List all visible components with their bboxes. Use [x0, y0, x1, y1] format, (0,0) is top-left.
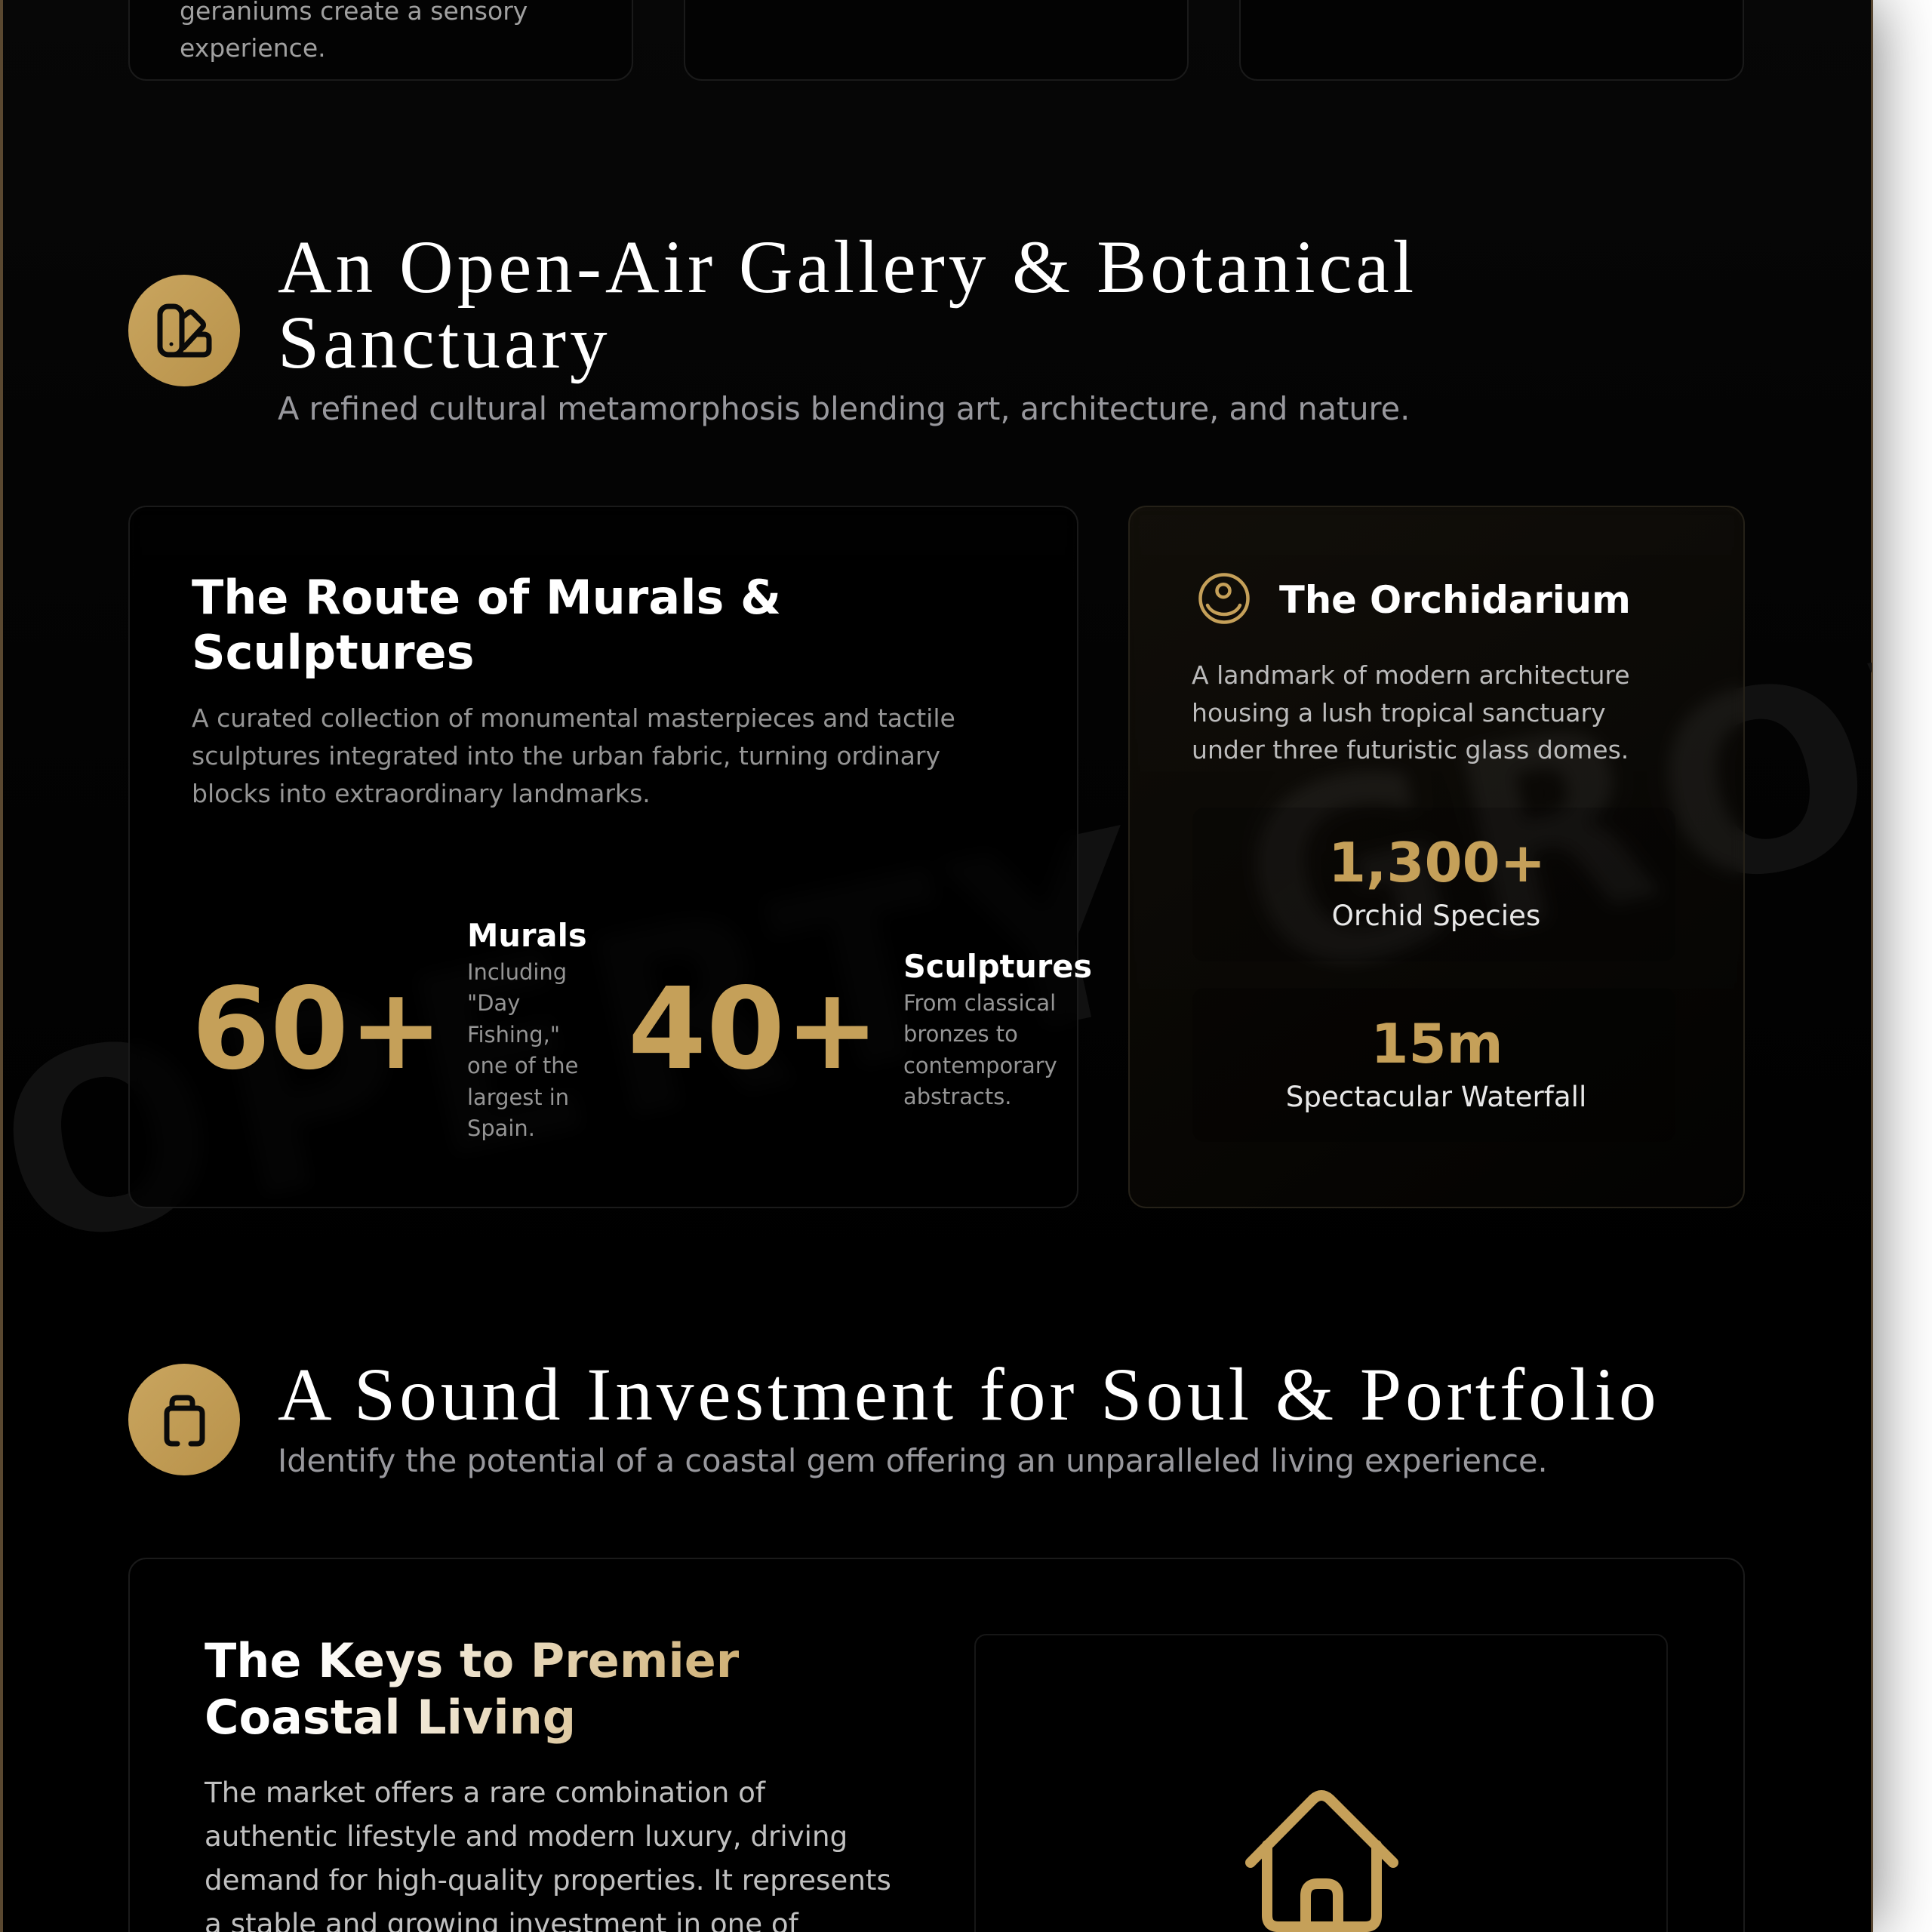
text block: murals description: "Day	[467, 990, 520, 1016]
heading: route of murals	[192, 569, 781, 679]
panel: top row card 2	[684, 0, 1189, 81]
icon: orchid circle	[1198, 573, 1250, 624]
text block: sculptures description: bronzes to	[903, 1021, 1018, 1047]
heading: gallery section	[278, 226, 1417, 384]
label: sculptures: Sculptures	[903, 949, 1092, 985]
text block: sculptures description: From classical	[903, 990, 1056, 1016]
icon: swatch badge	[128, 275, 240, 386]
subtitle: investment section: Identify the potential of a coastal gem offering an unparalleled living experience.	[278, 1443, 1548, 1479]
text block: orchidarium description: housing a lush tropical sanctuary	[1192, 697, 1606, 728]
label: murals: Murals	[467, 916, 587, 954]
heading: route of murals: Sculptures	[192, 625, 474, 679]
heading: keys to coastal living	[205, 1632, 739, 1746]
subtitle: gallery section: A refined cultural metamorphosis blending art, architecture, and nature.	[278, 391, 1410, 427]
text block: market description	[204, 1776, 891, 1932]
heading: keys to coastal living: Coastal Living	[205, 1690, 576, 1745]
text block: orchidarium description	[1192, 660, 1630, 764]
text block: route description	[192, 703, 955, 808]
stat: 1,300+: 1,300+	[1328, 831, 1546, 894]
stat: 40+: 40+	[628, 964, 879, 1095]
text block: orchidarium description: under three futuristic glass domes.	[1192, 735, 1629, 764]
text block: murals description: Including	[467, 959, 567, 985]
label: spectacular waterfall: Spectacular Waterfall	[1286, 1080, 1586, 1113]
stat box: orchid species	[1192, 808, 1675, 961]
stat: 60+: 60+	[192, 964, 443, 1095]
heading: route of murals: The Route of Murals &	[192, 569, 781, 625]
panel: top row card 3	[1239, 0, 1744, 81]
text block: market description: demand for high-quality properties. It represents	[205, 1863, 891, 1897]
icon: luggage badge	[128, 1364, 240, 1475]
text block: market description: authentic lifestyle and modern luxury, driving	[205, 1820, 848, 1853]
panel: route of murals	[128, 506, 1078, 1208]
icon: house	[1245, 1790, 1398, 1932]
text block: geraniums	[180, 0, 528, 63]
text block: route description: A curated collection of monumental masterpieces and tactile	[192, 703, 955, 733]
text block: murals description: one of the	[467, 1053, 578, 1078]
stat: 15m: 15m	[1371, 1012, 1503, 1075]
text block: murals description: Spain.	[467, 1115, 535, 1141]
text block: sculptures description: abstracts.	[903, 1084, 1011, 1109]
heading: investment section: A Sound Investment for Soul & Portfolio	[278, 1354, 1660, 1436]
label: orchid species: Orchid Species	[1332, 899, 1540, 932]
text block: route description: blocks into extraordinary landmarks.	[192, 779, 651, 808]
panel: the orchidarium	[1128, 506, 1745, 1208]
text block: murals description: Fishing,"	[467, 1022, 560, 1048]
panel: house image placeholder	[974, 1634, 1668, 1932]
text block: sculptures description	[903, 990, 1057, 1109]
text block: market description: The market offers a rare combination of	[205, 1776, 765, 1809]
panel: top row card 1	[128, 0, 633, 81]
text block: route description: sculptures integrated into the urban fabric, turning ordinary	[192, 741, 940, 771]
text block: murals description	[467, 959, 780, 1141]
heading: gallery section: An Open-Air Gallery & Botanical	[278, 226, 1417, 309]
stat box: waterfall	[1192, 988, 1675, 1142]
text block: orchidarium description: A landmark of modern architecture	[1192, 660, 1630, 690]
text block: sculptures description: contemporary	[903, 1053, 1057, 1078]
panel: keys to coastal living	[128, 1558, 1745, 1932]
heading: the orchidarium: The Orchidarium	[1279, 578, 1631, 622]
text block: geraniums: experience.	[180, 33, 326, 63]
heading: keys to coastal living: The Keys to Premier	[205, 1633, 739, 1688]
text block: murals description: largest in	[467, 1084, 569, 1110]
heading: gallery section: Sanctuary	[278, 302, 611, 384]
